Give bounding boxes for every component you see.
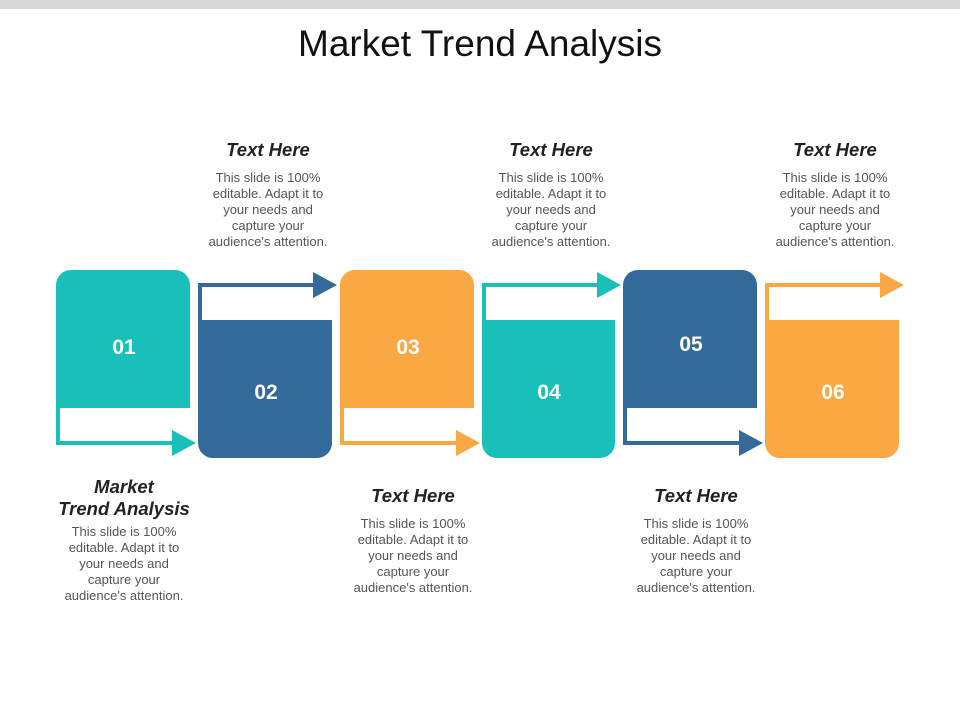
step 02: 02 <box>254 381 278 404</box>
step 04 <box>482 272 621 458</box>
step 06: 06 <box>821 381 845 404</box>
text block 02: This slide is 100% editable. Adapt it to your needs and capture your audience's attention. <box>209 170 327 249</box>
text block 01: Market <box>94 476 154 497</box>
step 03: 03 <box>396 336 420 359</box>
text block 05: This slide is 100% editable. Adapt it to your needs and capture your audience's attention. <box>637 516 755 595</box>
step 05: 05 <box>679 333 703 356</box>
step 01 <box>56 270 196 456</box>
text block 06: Text Here <box>793 139 877 160</box>
step 02 <box>198 272 337 458</box>
top bar <box>0 0 960 9</box>
text block 03: Text Here <box>371 485 455 506</box>
title: Market Trend Analysis <box>298 23 662 64</box>
step 06 <box>765 272 904 458</box>
text block 01: Trend Analysis <box>58 498 190 519</box>
step 04: 04 <box>537 381 561 404</box>
step 05 <box>623 270 763 456</box>
text block 01 <box>58 476 190 603</box>
text block 01: This slide is 100% editable. Adapt it to your needs and capture your audience's attention. <box>65 524 183 603</box>
step 03 <box>340 270 480 456</box>
text block 04: Text Here <box>509 139 593 160</box>
text block 04: This slide is 100% editable. Adapt it to your needs and capture your audience's attention. <box>492 170 610 249</box>
text block 06: This slide is 100% editable. Adapt it to your needs and capture your audience's attention. <box>776 170 894 249</box>
text block 03: This slide is 100% editable. Adapt it to your needs and capture your audience's attention. <box>354 516 472 595</box>
text block 05: Text Here <box>654 485 738 506</box>
step 01: 01 <box>112 336 136 359</box>
text block 02: Text Here <box>226 139 310 160</box>
